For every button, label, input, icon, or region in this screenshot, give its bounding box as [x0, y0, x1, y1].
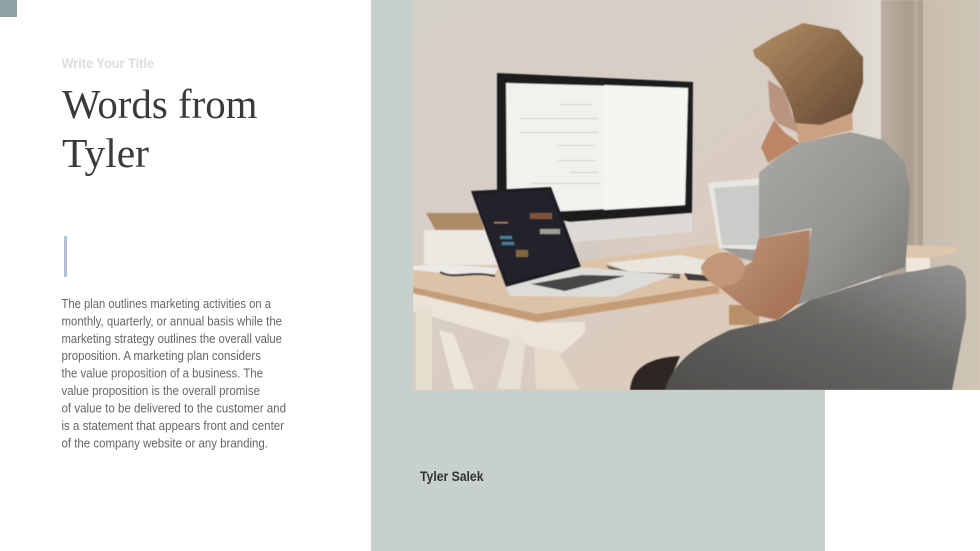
arm	[719, 230, 810, 320]
monitor	[497, 73, 693, 268]
face	[768, 80, 799, 133]
title: Tyler	[62, 130, 149, 176]
chin hand	[761, 120, 799, 163]
body paragraph	[62, 297, 286, 450]
photo: person working at a desk	[413, 0, 980, 390]
wall	[413, 0, 980, 390]
notebook and papers	[606, 255, 715, 281]
small laptop	[708, 178, 760, 262]
sage background panel	[371, 0, 825, 551]
chair	[630, 265, 966, 390]
hair	[753, 23, 863, 125]
open laptop	[471, 187, 674, 297]
body paragraph: value proposition is the overall promise	[62, 384, 260, 398]
body paragraph: the value proposition of a business. The	[62, 366, 263, 380]
shirt	[759, 132, 910, 305]
accent bar	[64, 236, 67, 277]
cables and papers on desk	[413, 264, 498, 276]
curtain	[881, 0, 980, 390]
body paragraph: proposition. A marketing plan considers	[62, 349, 261, 363]
person	[701, 23, 910, 320]
neck	[795, 113, 853, 143]
title: Words from	[62, 81, 258, 127]
body paragraph: of the company website or any branding.	[62, 436, 268, 450]
desk	[413, 243, 957, 390]
title	[62, 81, 258, 176]
eyebrow heading: Write Your Title	[62, 55, 154, 71]
desk shelf box	[424, 213, 500, 265]
typing hand	[701, 252, 745, 287]
body paragraph: The plan outlines marketing activities on a	[62, 297, 271, 311]
corner accent square	[0, 0, 17, 17]
